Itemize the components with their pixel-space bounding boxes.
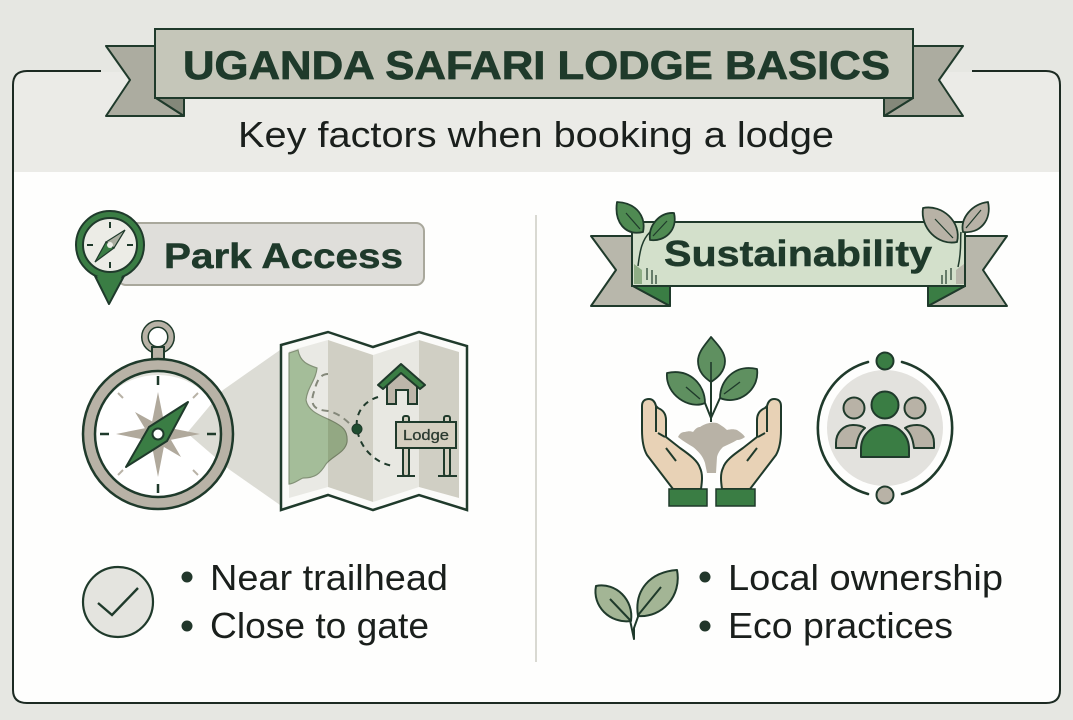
list: park access: Close to gate [210,605,429,646]
icon: hands with seedling [642,337,781,506]
leaves: right [923,202,989,284]
heading: Sustainability ribbon [591,202,1007,306]
list: sustainability: Eco practices [728,605,953,646]
lodge sign [396,416,457,476]
icon: compass pin [76,211,144,304]
list: sustainability [700,557,1003,646]
lodge sign: Lodge [403,427,449,444]
seedling [667,337,757,422]
heading text: Sustainability [664,233,932,274]
right hand [716,399,781,506]
icon: leaf sprig [595,570,678,639]
icon: folded map [281,332,467,510]
list: sustainability: Local ownership [728,557,1003,598]
icon: community circle [818,352,952,504]
left hand [642,399,707,506]
heading: Park Access [76,211,424,304]
list: park access [182,557,448,646]
soil [678,423,745,473]
subtitle: Key factors when booking a lodge [238,114,834,155]
icon: check badge [83,567,153,637]
title ribbon [106,29,963,116]
heading text: Park Access [164,237,403,276]
list: park access: Near trailhead [210,557,448,598]
icon: compass [83,324,280,509]
leaves: left [617,202,675,284]
title text: UGANDA SAFARI LODGE BASICS [183,44,890,88]
column divider [535,215,537,662]
house [378,364,425,404]
